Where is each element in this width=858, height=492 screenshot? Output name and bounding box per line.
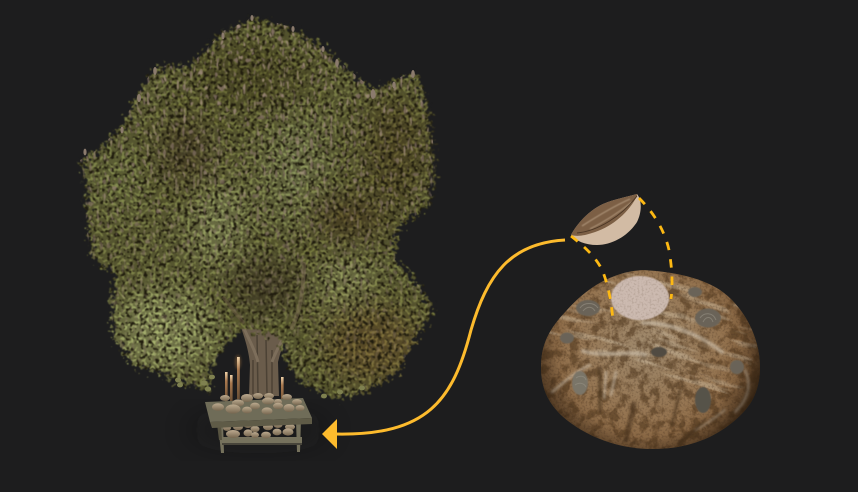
fragment outer surface xyxy=(571,194,637,236)
tree trunk and limbs xyxy=(234,308,298,396)
stray leaves below canopy xyxy=(175,375,365,398)
dashed guide lines from fragment to hole xyxy=(571,198,672,323)
boulder streak texture xyxy=(541,270,760,449)
blossom spikes xyxy=(70,10,450,405)
canopy branches xyxy=(224,264,304,328)
extracted stone fragment xyxy=(571,194,641,245)
stones on lower shelf xyxy=(223,422,295,438)
tree canopy foliage xyxy=(82,17,433,398)
ground shadow under table xyxy=(188,416,328,444)
fossil highlights xyxy=(575,304,716,387)
tree xyxy=(70,10,450,405)
fossils embedded in boulder xyxy=(560,287,744,413)
table top xyxy=(205,398,312,428)
curved arrow from fragment to table xyxy=(322,240,565,449)
cut hole in boulder xyxy=(610,275,670,321)
illustration: tree with offering table and cut stone xyxy=(77,15,760,453)
stones on table top xyxy=(212,393,304,415)
table lower shelf and legs xyxy=(217,420,302,453)
offering table xyxy=(205,355,312,453)
candles xyxy=(225,355,284,404)
boulder body xyxy=(541,270,760,449)
boulder xyxy=(541,270,760,449)
blossom tips on canopy edge xyxy=(83,15,415,155)
